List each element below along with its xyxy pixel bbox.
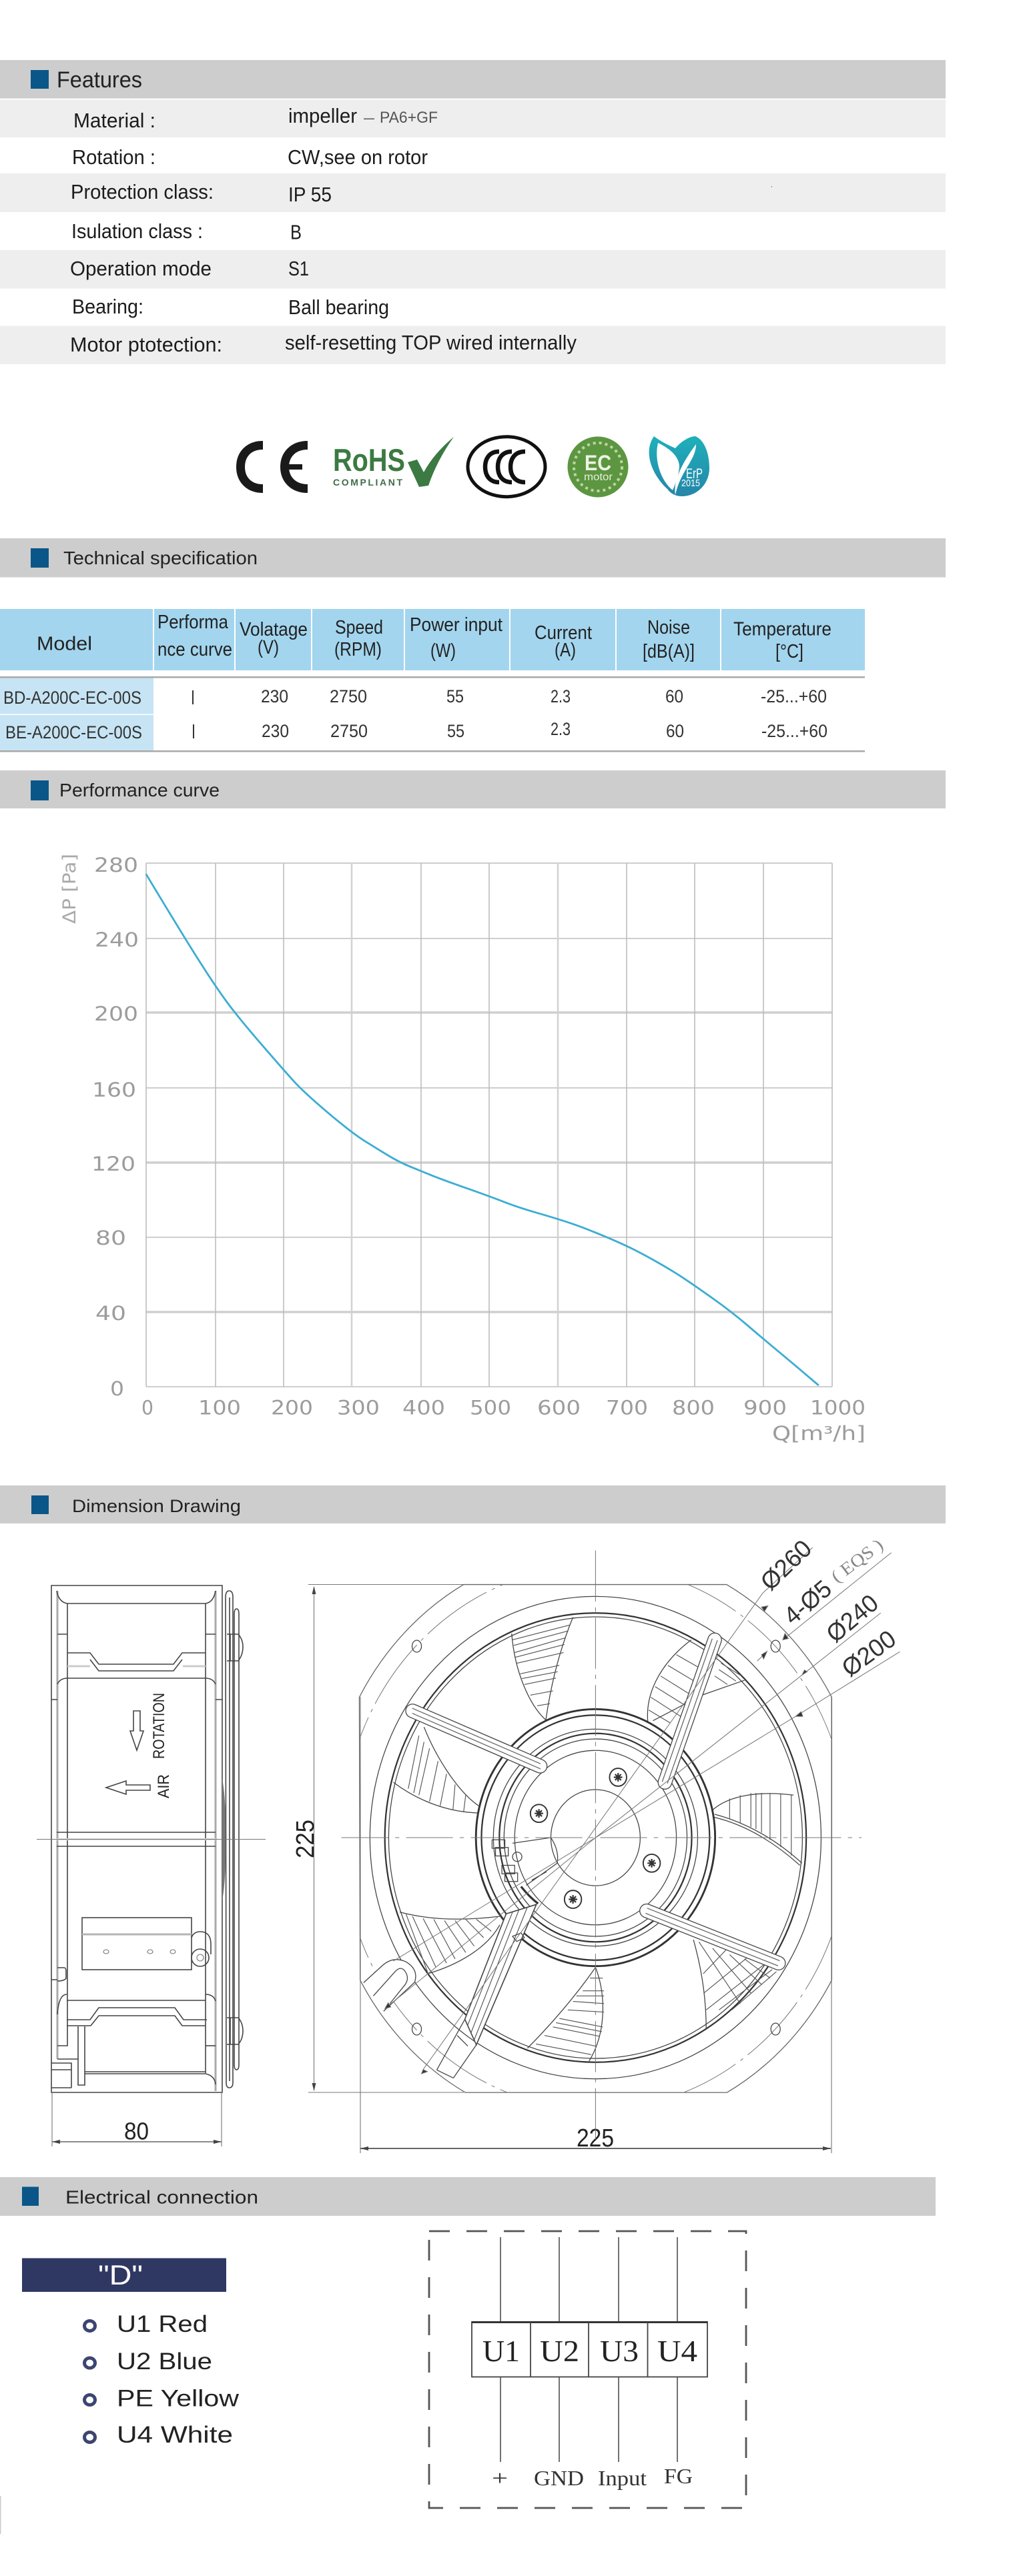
table header: (W) bbox=[430, 640, 456, 662]
table row: BE-A200C-EC-00S: 230 bbox=[262, 721, 289, 741]
y axis labels: 280 bbox=[94, 854, 138, 876]
dimension: 225 width bbox=[360, 1697, 831, 2153]
heading bar: electrical connection: Electrical connection bbox=[65, 2187, 258, 2208]
blade bottom left bbox=[400, 1912, 500, 1974]
table header: Performa bbox=[157, 612, 229, 633]
x axis labels: 400 bbox=[402, 1397, 445, 1419]
row: protection class: Protection class: bbox=[71, 180, 214, 203]
y axis labels bbox=[91, 854, 139, 1400]
side view of fan bbox=[37, 1585, 266, 2146]
wire: U4 white: U4 White bbox=[117, 2422, 233, 2448]
hub screws bbox=[531, 1768, 660, 1908]
label: diameter 260: Ø260 bbox=[755, 1535, 817, 1595]
table row: BD-A200C-EC-00S: 230 bbox=[261, 686, 288, 706]
table header: [dB(A)] bbox=[643, 641, 695, 662]
heading bar: features bbox=[0, 60, 946, 99]
blade bottom bbox=[527, 1968, 604, 2061]
table header bbox=[0, 609, 865, 670]
dimension: 225 height bbox=[292, 1585, 464, 2092]
terminal labels: GND bbox=[534, 2466, 584, 2490]
table header: (RPM) bbox=[334, 639, 382, 660]
terminal block: U3 bbox=[600, 2335, 639, 2368]
table header: Current bbox=[535, 622, 592, 644]
icon: RoHS compliant bbox=[333, 437, 454, 488]
table row: BE-A200C-EC-00S: 60 bbox=[666, 721, 684, 741]
y axis labels: 0 bbox=[110, 1377, 124, 1400]
row: bearing bbox=[72, 295, 389, 319]
row: material: PA6+GF bbox=[380, 109, 438, 127]
mounting holes bbox=[412, 1640, 780, 2035]
label: 4 holes diameter 5: 4-Ø5 bbox=[778, 1575, 837, 1630]
row: material bbox=[0, 100, 946, 137]
rotation label: ROTATION bbox=[150, 1693, 168, 1759]
heading bar: technical specification bbox=[0, 538, 946, 578]
heading bar: electrical connection bbox=[0, 2177, 936, 2216]
wires bbox=[500, 2237, 677, 2462]
heading bar: performance curve bbox=[0, 770, 946, 808]
row: rotation: CW,see on rotor bbox=[288, 145, 428, 169]
struts bbox=[412, 1639, 779, 2078]
terminal block: U4 bbox=[657, 2335, 697, 2368]
cable slot bbox=[364, 1960, 416, 2011]
x axis labels: 700 bbox=[606, 1397, 648, 1419]
row: motor protection: Motor ptotection: bbox=[70, 333, 222, 356]
terminal block bbox=[472, 2321, 707, 2377]
icon: ErP 2015 leaf: 2015 bbox=[681, 478, 700, 489]
x axis labels bbox=[141, 1397, 866, 1419]
label: diameter 240: Ø240 bbox=[821, 1589, 884, 1648]
row: operation mode: S1 bbox=[288, 257, 309, 280]
dimension: 80 bbox=[52, 2092, 222, 2146]
blade top bbox=[512, 1618, 573, 1721]
motor hub bbox=[476, 1709, 715, 1966]
table row: BE-A200C-EC-00S: -25...+60 bbox=[761, 721, 827, 741]
x axis labels: 100 bbox=[198, 1397, 241, 1419]
performance curve line bbox=[146, 874, 819, 1385]
y axis labels: 120 bbox=[91, 1153, 135, 1175]
icon: RoHS compliant: RoHS bbox=[333, 442, 405, 478]
row: isulation class bbox=[71, 219, 302, 244]
terminal block: U2 bbox=[540, 2335, 579, 2368]
heading bar: dimension drawing: Dimension Drawing bbox=[72, 1496, 241, 1516]
table header: [°C] bbox=[775, 641, 803, 662]
x axis labels: 600 bbox=[537, 1397, 581, 1419]
panel: features bbox=[0, 60, 946, 364]
table row: BE-A200C-EC-00S: 55 bbox=[447, 721, 464, 741]
row: material: impeller bbox=[288, 104, 357, 127]
terminal labels bbox=[492, 2464, 693, 2490]
panel: performance curve bbox=[0, 770, 946, 1445]
table header: nce curve bbox=[157, 639, 232, 660]
x axis labels: 900 bbox=[743, 1397, 787, 1419]
x axis labels: 0 bbox=[141, 1397, 153, 1419]
heading bar: features: Features bbox=[57, 67, 142, 93]
x axis title: Q[m³/h] bbox=[772, 1422, 866, 1445]
y axis labels: 160 bbox=[92, 1079, 136, 1101]
row: rotation: Rotation : bbox=[72, 145, 155, 169]
icon: ErP 2015 leaf: ErP bbox=[686, 466, 703, 482]
table row: BD-A200C-EC-00S bbox=[0, 678, 827, 714]
table header: Noise bbox=[647, 617, 690, 638]
blade right bbox=[713, 1793, 802, 1866]
outer rings bbox=[359, 1585, 831, 2092]
table header: Model bbox=[37, 634, 92, 655]
front view of fan bbox=[342, 1535, 901, 2144]
row: material: — bbox=[364, 109, 374, 126]
heading bar: dimension drawing bbox=[0, 1485, 946, 1523]
table row: BD-A200C-EC-00S: 55 bbox=[446, 686, 464, 706]
table row: BE-A200C-EC-00S: 2750 bbox=[330, 721, 368, 741]
fan blades bbox=[393, 1618, 802, 2061]
wire: U2 blue bbox=[84, 2349, 212, 2375]
row: isulation class: B bbox=[290, 220, 302, 244]
wire: U4 white bbox=[84, 2422, 233, 2448]
y axis labels: 200 bbox=[94, 1003, 138, 1025]
table row: BD-A200C-EC-00S: 60 bbox=[665, 686, 683, 706]
icon: ErP 2015 leaf bbox=[649, 436, 709, 496]
x axis labels: 200 bbox=[271, 1397, 313, 1419]
terminal labels: Input bbox=[598, 2466, 647, 2490]
row: operation mode: Operation mode bbox=[70, 257, 212, 280]
heading bar: performance curve: Performance curve bbox=[59, 780, 220, 800]
wiring diagram bbox=[429, 2231, 746, 2508]
rotation arrow bbox=[130, 1711, 143, 1750]
D label box: "D" bbox=[98, 2259, 143, 2291]
icon: CE mark bbox=[240, 446, 308, 488]
row: isulation class: Isulation class : bbox=[71, 219, 203, 243]
table rules bbox=[0, 676, 865, 752]
D label box bbox=[22, 2259, 226, 2292]
label: diameter 200: Ø200 bbox=[837, 1625, 901, 1682]
y axis labels: 80 bbox=[95, 1227, 126, 1249]
mounting plate outline bbox=[359, 1585, 831, 2092]
cable box bbox=[82, 1918, 211, 1970]
y axis title: ΔP [Pa] bbox=[59, 854, 80, 924]
wire: U1 red: U1 Red bbox=[117, 2311, 208, 2337]
x axis labels: 300 bbox=[337, 1397, 380, 1419]
table header: (A) bbox=[555, 640, 576, 661]
wire: PE yellow: PE Yellow bbox=[117, 2385, 240, 2412]
row: operation mode bbox=[0, 250, 946, 288]
row: protection class bbox=[0, 173, 946, 212]
table row: BE-A200C-EC-00S: BE-A200C-EC-00S bbox=[5, 722, 142, 742]
table row: BE-A200C-EC-00S bbox=[0, 715, 827, 750]
icon: EC motor badge bbox=[567, 436, 629, 498]
spec table bbox=[0, 609, 865, 752]
terminal labels: FG bbox=[664, 2464, 693, 2488]
wire: PE yellow bbox=[84, 2385, 240, 2412]
table header: Volatage bbox=[240, 619, 308, 640]
dimension: 225 height: 225 bbox=[292, 1820, 320, 1858]
table row: BD-A200C-EC-00S: BD-A200C-EC-00S bbox=[3, 688, 141, 708]
terminal block bbox=[492, 1838, 558, 1904]
y axis labels: 40 bbox=[95, 1302, 126, 1325]
row: protection class: IP 55 bbox=[288, 183, 332, 206]
wire: U2 blue: U2 Blue bbox=[117, 2349, 212, 2375]
table row: BE-A200C-EC-00S: 2.3 bbox=[551, 719, 571, 739]
terminal block: U1 bbox=[482, 2335, 520, 2368]
heading bar: technical specification: Technical specification bbox=[63, 548, 258, 568]
row: material: Material : bbox=[73, 109, 155, 132]
table header: Power input bbox=[410, 614, 502, 636]
table header: (V) bbox=[258, 637, 279, 658]
y axis labels: 240 bbox=[95, 928, 139, 951]
air arrow bbox=[106, 1781, 150, 1794]
x axis labels: 500 bbox=[470, 1397, 511, 1419]
panel: electrical connection bbox=[0, 2177, 936, 2508]
air label: AIR bbox=[155, 1774, 173, 1798]
table header: Temperature bbox=[733, 619, 831, 640]
line chart: pressure vs airflow bbox=[59, 854, 866, 1445]
x axis labels: 1000 bbox=[810, 1397, 866, 1419]
center lines bbox=[342, 1551, 862, 2144]
blade top right bbox=[647, 1640, 745, 1723]
certification logos bbox=[240, 436, 709, 498]
blade left bbox=[393, 1727, 478, 1813]
dimension: 80: 80 bbox=[124, 2117, 149, 2145]
wire: U1 red bbox=[84, 2311, 208, 2337]
x axis labels: 800 bbox=[672, 1397, 715, 1419]
side center line bbox=[37, 1838, 266, 1840]
table header: Speed bbox=[335, 617, 383, 638]
diameter leader lines bbox=[385, 1547, 900, 2074]
row: motor protection bbox=[0, 326, 946, 364]
row: motor protection: self-resetting TOP wired internally bbox=[285, 331, 577, 354]
wire colour list bbox=[84, 2311, 240, 2448]
label: EQS: ( EQS ) bbox=[827, 1535, 887, 1586]
icon: EC motor badge: EC bbox=[585, 451, 611, 475]
row: bearing: Bearing: bbox=[72, 295, 143, 318]
icon: CCC mark bbox=[468, 437, 545, 497]
panel: dimension drawing bbox=[0, 1485, 946, 2153]
row: bearing: Ball bearing bbox=[288, 295, 389, 319]
terminal labels: + bbox=[492, 2466, 508, 2490]
table row: BD-A200C-EC-00S: -25...+60 bbox=[761, 686, 827, 706]
icon: EC motor badge: motor bbox=[584, 472, 613, 483]
row: rotation bbox=[72, 145, 428, 169]
table row: BD-A200C-EC-00S: 2750 bbox=[330, 686, 367, 706]
dimension: 225 width: 225 bbox=[577, 2124, 614, 2152]
table row: BD-A200C-EC-00S: 2.3 bbox=[551, 686, 571, 706]
blade bottom right bbox=[693, 1940, 776, 2029]
dashed enclosure bbox=[429, 2231, 746, 2508]
panel: technical specification bbox=[0, 538, 946, 752]
icon: RoHS compliant: COMPLIANT bbox=[333, 477, 402, 488]
